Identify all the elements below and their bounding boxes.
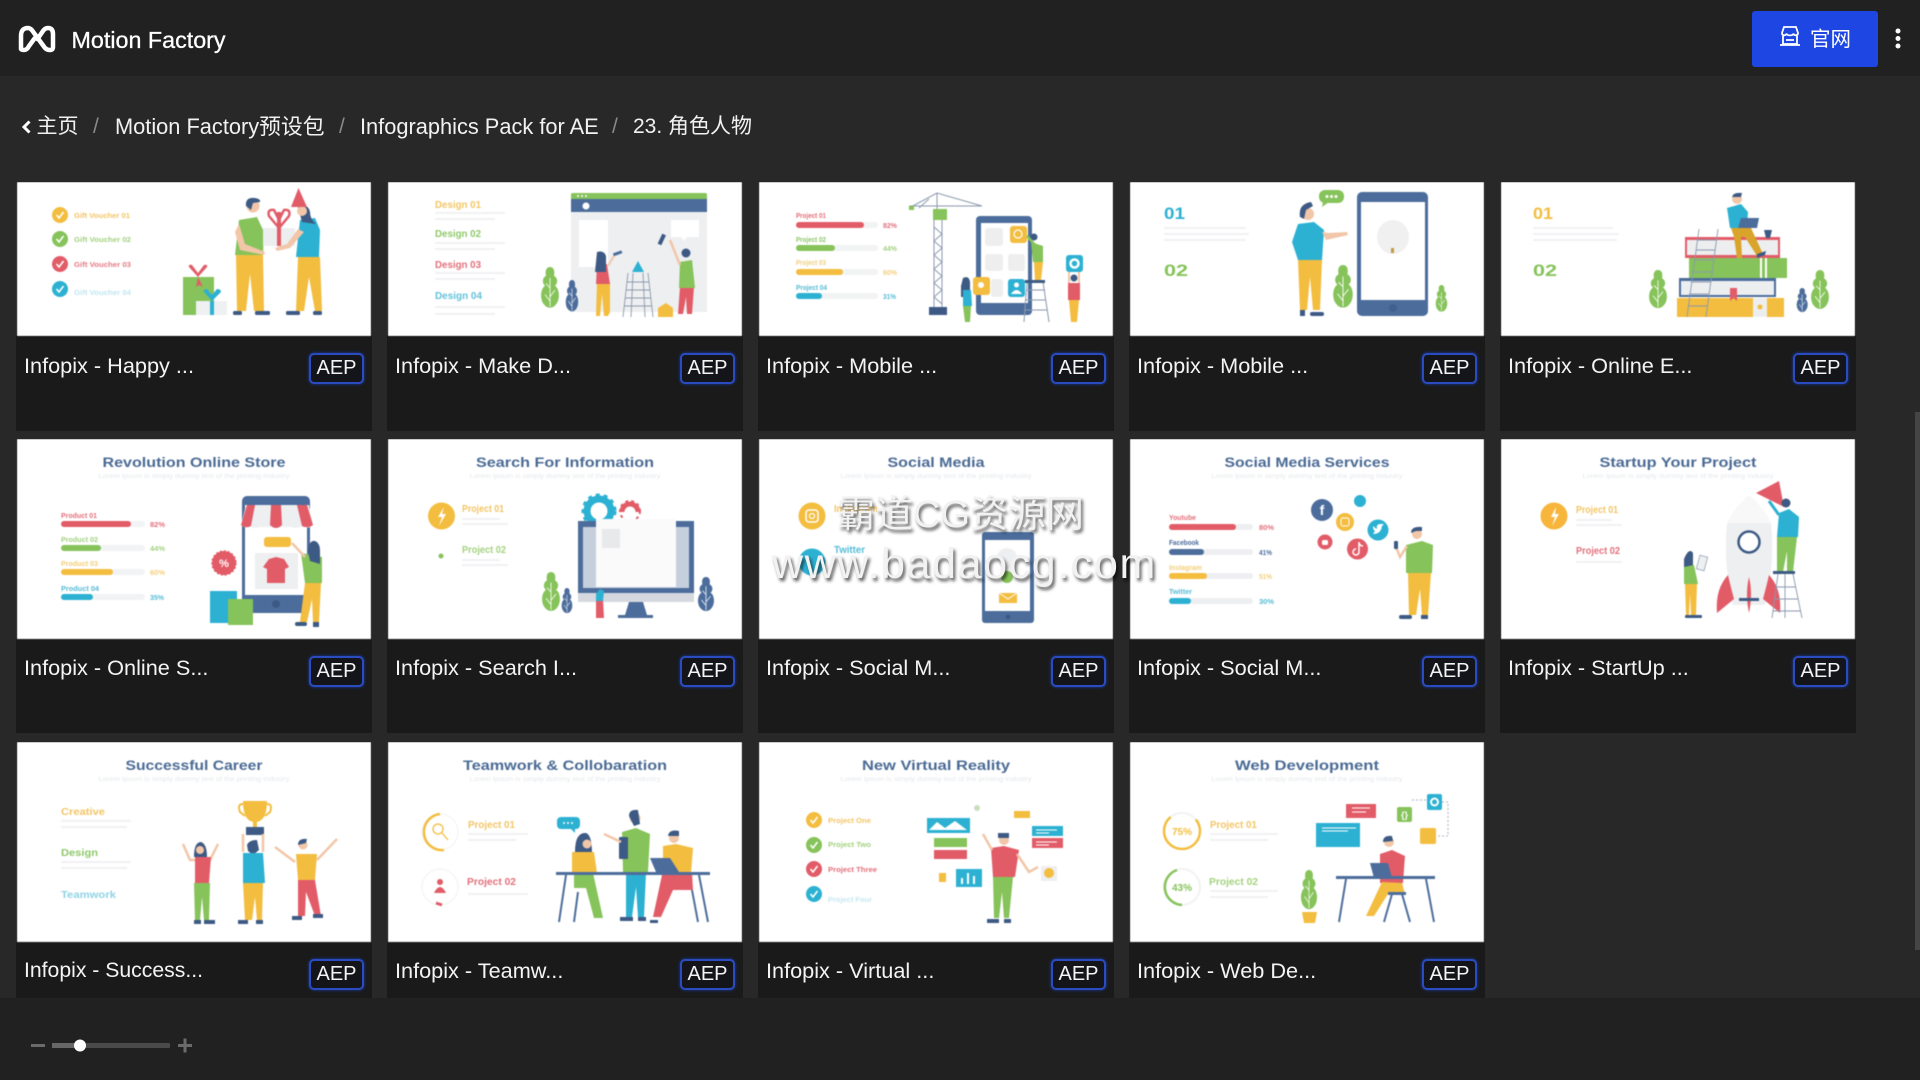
- product bars: 82%: [150, 520, 165, 529]
- progress bars: Project 02: [796, 235, 826, 244]
- product bars: Product 04: [61, 584, 100, 593]
- channel list: Instagram: [834, 504, 878, 515]
- left woman: [183, 842, 218, 924]
- title: Infopix - Online E...: [1508, 353, 1692, 378]
- channel bars: Facebook: [1169, 538, 1200, 547]
- skill list: Creative: [61, 807, 105, 818]
- channel bars: Youtube: [1169, 513, 1196, 522]
- format badge: [680, 959, 735, 990]
- official site button: [1752, 11, 1878, 67]
- numbered items: 01: [1164, 204, 1185, 223]
- format badge: [680, 353, 735, 384]
- format badge: AEP: [1058, 660, 1099, 682]
- channel list: Twitter: [834, 545, 865, 556]
- heading: Lorem Ipsum is simply dummy text of the printing industry: [98, 473, 290, 480]
- project list: Project 01: [1210, 820, 1257, 831]
- thumbnail: mobile with person: [1129, 182, 1485, 337]
- project list: [1209, 820, 1278, 898]
- channel bars: 51%: [1259, 572, 1272, 581]
- heading: Startup Your Project: [1600, 455, 1757, 470]
- design list: Design 01: [435, 200, 481, 211]
- plants and figure: [542, 572, 714, 618]
- monitor: [578, 519, 694, 618]
- design list: Design 04: [435, 291, 482, 302]
- voucher list: [52, 207, 132, 297]
- title: Infopix - Happy ...: [24, 353, 194, 378]
- gift boxes: [183, 265, 227, 315]
- product bars: 44%: [150, 544, 165, 553]
- speech bubble: [557, 817, 580, 833]
- project list: Project 02: [1209, 877, 1258, 888]
- format badge: AEP: [687, 963, 728, 985]
- skill list: [61, 807, 131, 901]
- numbered items: 02: [1164, 261, 1188, 280]
- card: Virtual Reality: [758, 742, 1114, 998]
- breadcrumb: pack name: Infographics Pack for AE: [360, 114, 599, 139]
- heading: [840, 758, 1032, 783]
- title: Infopix - Mobile ...: [766, 353, 937, 378]
- standing man: [604, 810, 650, 921]
- thumbnail: web design: [387, 182, 743, 337]
- card: Mobile 1: [758, 182, 1114, 431]
- project check list: Project Four: [828, 895, 872, 904]
- channel bars: 30%: [1259, 597, 1274, 606]
- scrollbar: [1915, 412, 1920, 950]
- breadcrumb: preset pack: Motion Factory预设包: [115, 114, 325, 139]
- heading: Lorem Ipsum is simply dummy text of the printing industry: [1582, 473, 1774, 480]
- developer at desk: [1336, 836, 1435, 922]
- card: Search Information: [387, 439, 743, 733]
- channel bars: Instagram: [1169, 563, 1202, 572]
- format badge: [309, 353, 364, 384]
- numbered items: [1533, 204, 1619, 280]
- phone: [982, 532, 1034, 623]
- format badge: AEP: [687, 357, 728, 379]
- heading: [840, 455, 1032, 480]
- progress bars: 82%: [883, 221, 897, 230]
- percent rings: [1157, 806, 1207, 905]
- format badge: [309, 959, 364, 990]
- plants: [1333, 265, 1447, 312]
- card: Social Media: [758, 439, 1114, 733]
- design list: Design 02: [435, 229, 481, 240]
- top navigation bar: [0, 0, 1920, 76]
- product bars: [61, 511, 165, 602]
- held gift: [263, 210, 304, 251]
- format badge: AEP: [1800, 660, 1841, 682]
- project check list: [806, 812, 877, 904]
- thumbnail: mobile development: [758, 182, 1114, 337]
- book stack: [1677, 237, 1787, 317]
- project check list: Project Three: [828, 865, 877, 874]
- title: Infopix - StartUp ...: [1508, 655, 1689, 680]
- title: Infopix - Mobile ...: [1137, 353, 1308, 378]
- gears: [583, 495, 640, 527]
- speech bubble: [1319, 190, 1344, 207]
- icon: store: [1780, 26, 1800, 46]
- heading: New Virtual Reality: [862, 758, 1011, 773]
- design list: Design 03: [435, 260, 481, 271]
- separator: /: [339, 115, 345, 138]
- woman with tablet: [1684, 551, 1708, 618]
- title: Infopix - Social M...: [1137, 655, 1321, 680]
- heading: [1212, 758, 1403, 783]
- progress bars: Project 04: [796, 283, 828, 292]
- code panels: [1316, 794, 1448, 847]
- button label: 官网: [1810, 28, 1851, 51]
- heading: Revolution Online Store: [102, 455, 286, 470]
- progress bars: 44%: [883, 244, 897, 253]
- percent rings: 75%: [1172, 827, 1192, 838]
- thumbnail: new virtual reality: [758, 742, 1114, 942]
- numbered items: [1164, 204, 1249, 280]
- workers: [961, 234, 1083, 322]
- voucher list: Gift Voucher 01: [74, 211, 130, 220]
- two people exchanging gift: [233, 188, 322, 315]
- man with VR headset: [983, 833, 1038, 923]
- heading: [1582, 455, 1774, 480]
- percent rings: 43%: [1172, 883, 1192, 894]
- code panels: {}: [1401, 810, 1408, 820]
- skill list: Teamwork: [61, 890, 116, 901]
- card: Mobile 2: [1129, 182, 1485, 431]
- card: Online Store: [16, 439, 372, 733]
- card: Successful Career: [16, 742, 372, 998]
- title: Infopix - Virtual ...: [766, 958, 934, 983]
- format badge: [1422, 656, 1477, 687]
- project list: [1540, 502, 1622, 563]
- social icons: f: [1320, 502, 1325, 518]
- climber on ladder: [1769, 498, 1802, 618]
- heading: Search For Information: [476, 455, 654, 470]
- thumbnail: books and reader: [1500, 182, 1856, 337]
- voucher list: Gift Voucher 02: [74, 235, 131, 244]
- skill list: Design: [61, 848, 98, 859]
- discount badge: [212, 551, 236, 575]
- format badge: AEP: [1058, 963, 1099, 985]
- format badge: AEP: [316, 963, 357, 985]
- progress bars: Project 03: [796, 258, 826, 267]
- person: [1292, 202, 1348, 316]
- project list: Project 01: [468, 820, 515, 831]
- thumbnail: startup rocket: [1500, 439, 1856, 639]
- plants: [541, 267, 578, 311]
- product bars: 35%: [150, 593, 164, 602]
- icon: more menu: [1896, 28, 1900, 48]
- heading: Lorem Ipsum is simply dummy text of the printing industry: [98, 776, 290, 783]
- breadcrumb: home: 主页: [36, 115, 78, 138]
- title: Infopix - Success...: [24, 959, 203, 982]
- card: Teamwork: [387, 742, 743, 998]
- format badge: [1051, 353, 1106, 384]
- format badge: AEP: [1800, 357, 1841, 379]
- product bars: Product 02: [61, 535, 98, 544]
- logo icon: [18, 26, 56, 52]
- heading: Lorem Ipsum is simply dummy text of the printing industry: [1212, 776, 1403, 783]
- reader with laptop: [1727, 193, 1772, 258]
- heading: Teamwork & Collobaration: [463, 758, 667, 773]
- project list: [428, 502, 508, 566]
- card: Make Design: [387, 182, 743, 431]
- format badge: [1051, 959, 1106, 990]
- project list: Project 02: [467, 877, 516, 888]
- format badge: AEP: [687, 660, 728, 682]
- card: Online Education: [1500, 182, 1856, 431]
- thumbnail: web development: [1129, 742, 1485, 942]
- project list: [422, 814, 528, 905]
- thumbnail: social media phone: [758, 439, 1114, 639]
- channel bars: 41%: [1259, 548, 1272, 557]
- title: Infopix - Social M...: [766, 655, 950, 680]
- shopping bags: [210, 591, 253, 625]
- format badge: AEP: [316, 660, 357, 682]
- project check list: Project One: [828, 816, 871, 825]
- title: Infopix - Online S...: [24, 655, 208, 680]
- center man with trophy: [238, 801, 271, 924]
- format badge: AEP: [1429, 660, 1470, 682]
- project list: Project 01: [1576, 505, 1618, 516]
- thumbnail: search for information: [387, 439, 743, 639]
- heading: [1212, 455, 1403, 480]
- right man: [275, 839, 337, 920]
- title: Infopix - Web De...: [1137, 958, 1316, 983]
- man with phone: [1394, 527, 1433, 619]
- design list: [435, 200, 505, 315]
- discount badge: %: [219, 558, 229, 570]
- separator: /: [93, 115, 99, 138]
- heading: Lorem Ipsum is simply dummy text of the printing industry: [840, 776, 1032, 783]
- voucher list: Gift Voucher 03: [74, 260, 131, 269]
- heading: Web Development: [1235, 758, 1380, 773]
- title: Infopix - Make D...: [395, 353, 571, 378]
- watermark: site name: 霸道CG资源网: [837, 494, 1084, 536]
- footer bar: [0, 998, 1920, 1080]
- ladder: [1687, 229, 1718, 317]
- plants: [1649, 270, 1829, 312]
- format badge: [1793, 656, 1848, 687]
- product bars: Product 01: [61, 511, 97, 520]
- social icons: [1311, 495, 1388, 560]
- watermark: site URL: www.badaocg.com: [772, 540, 1157, 588]
- table: [556, 872, 710, 922]
- card: StartUp: [1500, 439, 1856, 733]
- product bars: Product 03: [61, 559, 98, 568]
- heading: [463, 758, 667, 783]
- thumbnail: teamwork: [387, 742, 743, 942]
- project list: Project 02: [1576, 546, 1620, 557]
- thumbnail: successful career: [16, 742, 372, 942]
- phone: [1357, 192, 1428, 316]
- project check list: Project Two: [828, 840, 871, 849]
- painters and ladder: [595, 234, 695, 317]
- shopper: [292, 541, 322, 627]
- format badge: AEP: [316, 357, 357, 379]
- breadcrumb navigation: [22, 114, 752, 139]
- format badge: AEP: [1429, 963, 1470, 985]
- floating panels: [927, 805, 1063, 887]
- progress bars: 60%: [883, 268, 897, 277]
- heading: Successful Career: [126, 758, 263, 773]
- format badge: [1051, 656, 1106, 687]
- potted plant: [1301, 870, 1317, 923]
- breadcrumb: current category: 23. 角色人物: [633, 115, 752, 138]
- channel bars: Twitter: [1169, 587, 1192, 596]
- icon: back chevron: [22, 120, 30, 134]
- format badge: AEP: [1429, 357, 1470, 379]
- project list: Project 01: [462, 504, 504, 515]
- thumbnail: revolution online store: [16, 439, 372, 639]
- title: Infopix - Teamw...: [395, 958, 563, 983]
- heading: Lorem Ipsum is simply dummy text of the printing industry: [1212, 473, 1403, 480]
- watermark: [772, 494, 1157, 592]
- card: Web Development: [1129, 742, 1485, 998]
- zoom slider: [31, 1038, 192, 1052]
- storefront phone: [241, 496, 313, 613]
- brand name: Motion Factory: [72, 27, 226, 53]
- channel list: [798, 502, 878, 576]
- format badge: [1793, 353, 1848, 384]
- thumbnail: gift vouchers: [16, 182, 372, 337]
- format badge: AEP: [1058, 357, 1099, 379]
- separator: /: [612, 115, 618, 138]
- format badge: [1422, 353, 1477, 384]
- heading: Lorem Ipsum is simply dummy text of the printing industry: [840, 473, 1032, 480]
- heading: Social Media: [888, 455, 985, 470]
- heading: Lorem Ipsum is simply dummy text of the printing industry: [470, 473, 661, 480]
- rocket: [1717, 481, 1784, 613]
- progress bars: [796, 211, 897, 301]
- voucher list: Gift Voucher 04: [74, 288, 132, 297]
- heading: [470, 455, 661, 480]
- heading: Social Media Services: [1224, 455, 1390, 470]
- product bars: 60%: [150, 568, 165, 577]
- progress bars: 31%: [883, 292, 896, 301]
- heading: [98, 758, 290, 783]
- numbered items: 02: [1533, 261, 1557, 280]
- crane: [909, 193, 982, 315]
- phone with app tiles: [973, 216, 1032, 315]
- format badge: [1422, 959, 1477, 990]
- browser window: [571, 193, 707, 312]
- title: Infopix - Search I...: [395, 655, 577, 680]
- format badge: [680, 656, 735, 687]
- card: Social Media Services: [1129, 439, 1485, 733]
- card: Happy: [16, 182, 372, 431]
- thumbnail: social media services: [1129, 439, 1485, 639]
- seated man with laptop: [650, 831, 693, 923]
- heading: Lorem Ipsum is simply dummy text of the printing industry: [470, 776, 661, 783]
- progress bars: Project 01: [796, 211, 826, 220]
- project list: Project 02: [462, 545, 506, 556]
- numbered items: 01: [1533, 204, 1553, 223]
- format badge: [309, 656, 364, 687]
- seated woman: [572, 833, 603, 918]
- channel bars: 80%: [1259, 523, 1274, 532]
- channel bars: [1169, 513, 1274, 606]
- heading: [98, 455, 290, 480]
